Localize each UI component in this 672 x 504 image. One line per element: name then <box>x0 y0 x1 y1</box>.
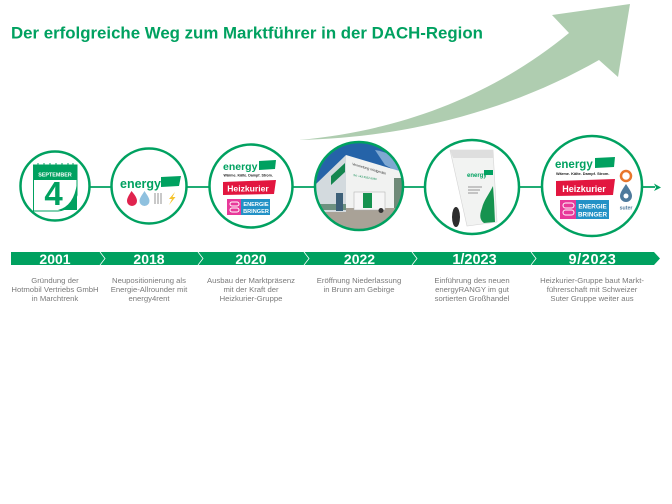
Energie Bringer logo <box>227 199 270 215</box>
month label: SEPTEMBER <box>38 172 72 178</box>
calendar header <box>34 165 77 180</box>
year 9/2023: 9/2023 <box>569 252 616 268</box>
energy wordmark: energy <box>555 159 593 171</box>
year 2022: 2022 <box>344 251 375 267</box>
caption 2020 <box>207 276 295 303</box>
green flame <box>480 186 495 223</box>
caption 2020: Ausbau der Marktpräsenz <box>207 276 295 285</box>
caption 9/2023: Suter Gruppe weiter aus <box>550 294 634 303</box>
caption 9/2023: führerschaft mit Schweizer <box>547 285 638 294</box>
milestone 2018: energy4rent logo <box>112 148 186 224</box>
energy wordmark: energy <box>120 177 161 191</box>
year 1/2023: 1/2023 <box>452 252 497 268</box>
caption 9/2023 <box>540 276 644 303</box>
calendar page curl <box>58 183 77 210</box>
growth arrow <box>299 4 630 140</box>
trailer <box>354 192 385 210</box>
front building wall <box>316 155 346 212</box>
building stripe: Tel: +43 5532 6090 <box>353 173 377 181</box>
milestone 2022: building photo <box>314 141 404 232</box>
sky <box>316 143 394 184</box>
title: Der erfolgreiche Weg zum Marktführer in der DACH-Region <box>11 24 483 42</box>
caption 2018: Energie-Allrounder mit <box>111 285 188 294</box>
device label tag <box>484 170 493 175</box>
caption 1/2023 <box>434 276 510 303</box>
Energie Bringer logo: BRINGER <box>243 209 269 215</box>
clouds <box>375 150 399 171</box>
green sign <box>331 163 345 185</box>
milestone 9/2023: partner logos <box>542 136 642 236</box>
Heizkurier logo: Heizkurier <box>562 184 606 194</box>
door <box>336 193 343 211</box>
trees right <box>394 178 402 208</box>
wheel <box>452 207 460 227</box>
year 2020: 2020 <box>235 251 267 267</box>
tagline: Wärme. Kälte. Dampf. Strom. <box>224 174 273 178</box>
timeline connector arrow <box>55 184 661 191</box>
caption 2018: Neupositionierung als <box>112 276 186 285</box>
caption 2018: energy4rent <box>128 294 170 303</box>
calendar rings <box>38 163 73 168</box>
Energie Bringer logo: BRINGER <box>578 212 607 218</box>
Suter logo: suter <box>620 206 632 212</box>
caption 2001 <box>11 276 99 303</box>
trans tag <box>259 160 276 170</box>
year 2001: 2001 <box>39 251 71 267</box>
blue drop icon <box>140 191 150 206</box>
caption 2020: Heizkurier-Gruppe <box>220 294 282 303</box>
long building wall <box>346 155 403 208</box>
red flame icon <box>127 191 137 206</box>
tagline: Wärme. Kälte. Dampf. Strom. <box>556 171 609 176</box>
Energie Bringer logo: ENERGIE <box>243 202 269 208</box>
caption 2020: mit der Kraft der <box>223 285 279 294</box>
caption 2001: Hotmobil Vertriebs GmbH <box>11 285 99 294</box>
timeline band <box>11 251 660 268</box>
milestone 2020: partner logos <box>210 144 292 228</box>
caption 9/2023: Heizkurier-Gruppe baut Markt- <box>540 276 644 285</box>
energy wordmark: energy <box>223 161 258 173</box>
steam icon <box>155 193 161 204</box>
caption 2022 <box>317 276 401 294</box>
year 2018: 2018 <box>133 251 165 267</box>
calendar page <box>34 165 77 211</box>
caption 2001: Gründung der <box>31 276 79 285</box>
device logo: energy <box>467 173 487 179</box>
caption 2018 <box>111 276 188 303</box>
caption 2022: in Brunn am Gebirge <box>324 285 394 294</box>
4rent tag <box>161 176 181 187</box>
Heizkurier logo: Heizkurier <box>227 184 269 194</box>
caption 1/2023: energyRANGY im gut <box>435 285 510 294</box>
milestone 2001: calendar icon <box>20 152 90 220</box>
building lettering: Vermietung mietgeräte <box>352 162 387 176</box>
trans tag <box>595 157 615 168</box>
Energie Bringer logo: ENERGIE <box>578 204 607 210</box>
device top <box>450 150 493 158</box>
device text lines <box>468 187 482 193</box>
lightning icon <box>169 192 176 205</box>
Energie Bringer logo <box>560 200 609 219</box>
caption 2001: in Marchtrenk <box>32 294 78 303</box>
caption 1/2023: Einführung des neuen <box>434 276 510 285</box>
day number: 4 <box>44 175 63 212</box>
milestone 1/2023: energyRANGY product <box>425 140 519 234</box>
ground <box>325 208 396 229</box>
device body <box>450 150 497 226</box>
caption 2022: Eröffnung Niederlassung <box>317 276 401 285</box>
caption 1/2023: sortierten Großhandel <box>435 294 510 303</box>
